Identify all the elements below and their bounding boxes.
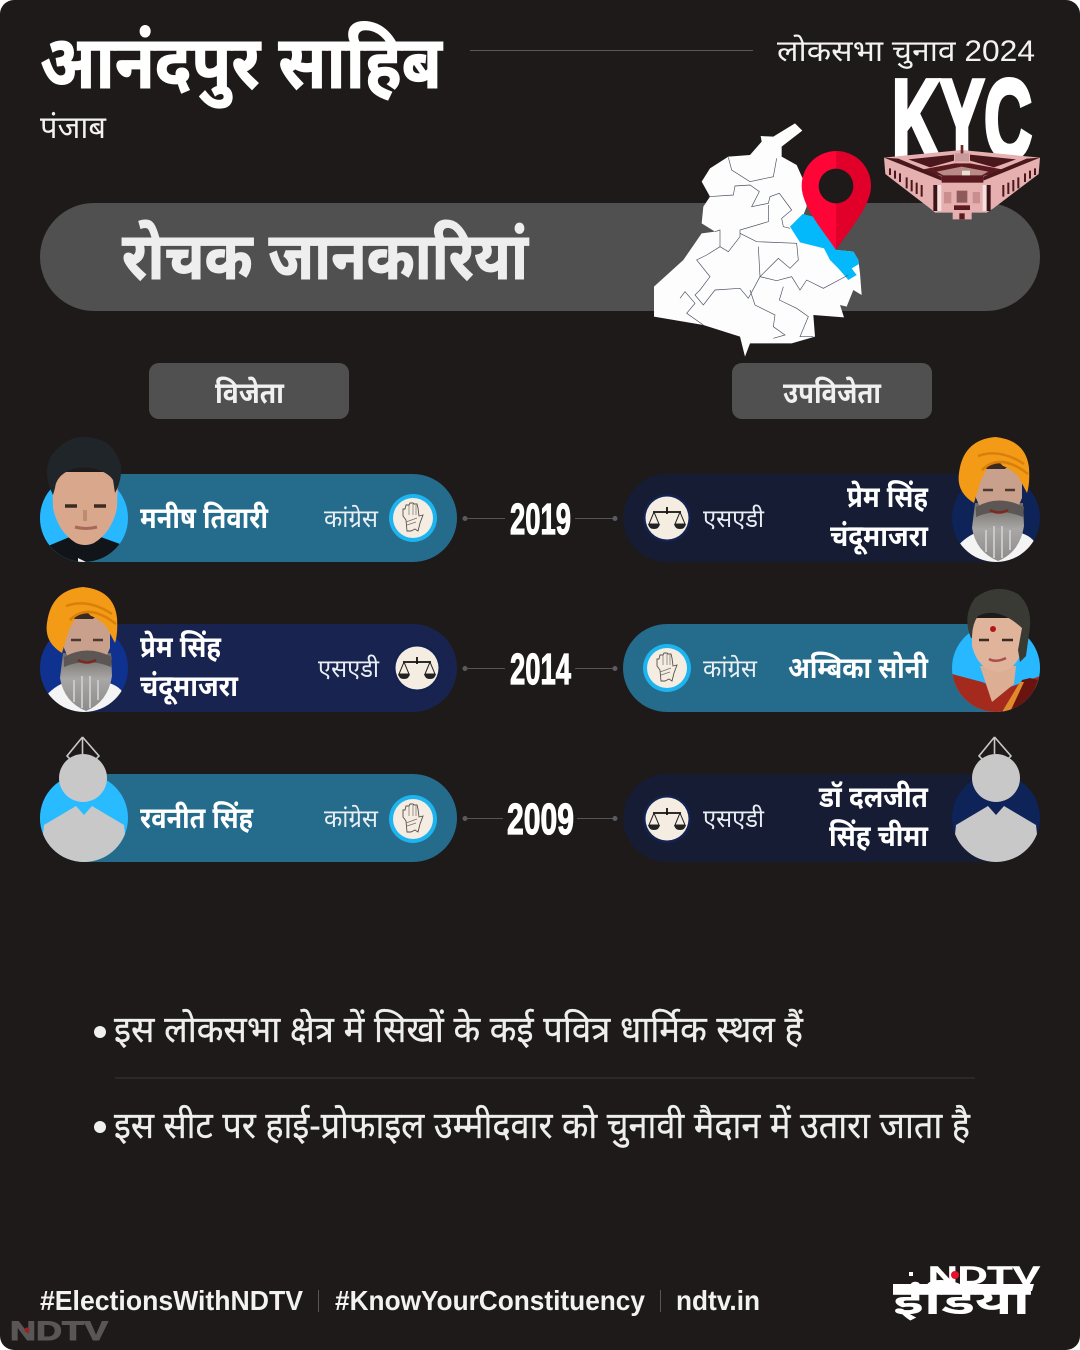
footer hashtags: #KnowYourConstituency: [335, 1285, 645, 1316]
fact 2: इस सीट पर हाई-प्रोफाइल उम्मीदवार को चुनावी मैदान में उतारा जाता है: [114, 1104, 971, 1148]
winner name: मनीष तिवारी: [140, 501, 269, 535]
row 2009 winner: [40, 737, 457, 862]
placeholder portrait: [40, 737, 128, 862]
footer hashtags: ndtv.in: [676, 1285, 760, 1316]
party name: कांग्रेस: [703, 653, 758, 683]
runner-up name: प्रेम सिंह: [847, 479, 929, 514]
label: winner: विजेता: [215, 375, 285, 410]
winner name: चंदूमाजरा: [140, 670, 239, 705]
NDTV watermark: NDTV: [10, 1316, 108, 1346]
NDTV India logo: NDTV: [928, 1262, 1041, 1290]
title: आनंदपुर साहिब: [40, 21, 443, 108]
label: winner: [149, 363, 349, 419]
row 2019 year: [462, 495, 618, 544]
icon: scales symbol: [643, 795, 691, 843]
icon: hand symbol: [389, 795, 437, 843]
row 2019 runner-up: [623, 437, 1040, 562]
election label: लोकसभा चुनाव 2024: [777, 34, 1035, 69]
portrait: Prem Singh Chandumajra: [952, 437, 1040, 562]
party name: कांग्रेस: [324, 803, 379, 833]
map of Punjab: [654, 123, 862, 357]
row 2009 runner-up: [623, 737, 1040, 862]
row 2019 winner: [40, 437, 457, 562]
icon: hand symbol: [389, 494, 437, 542]
runner-up name: डॉ दलजीत: [818, 780, 929, 814]
row 2014 runner-up: [623, 589, 1040, 712]
runner-up name: अम्बिका सोनी: [788, 651, 929, 685]
icon: scales symbol: [393, 644, 441, 692]
NDTV India logo: इंडिया: [893, 1279, 1031, 1323]
footer hashtags: #ElectionsWithNDTV: [40, 1285, 303, 1316]
label: runner-up: उपविजेता: [783, 375, 882, 410]
icon: location pin: [802, 151, 871, 250]
NDTV India logo: [893, 1262, 1041, 1323]
icon: scales symbol: [643, 494, 691, 542]
portrait: Ambika Soni: [952, 589, 1040, 712]
label: runner-up: [732, 363, 932, 419]
party name: एसएडी: [703, 804, 764, 833]
party name: एसएडी: [318, 654, 379, 683]
footer hashtags: [40, 1285, 760, 1316]
row 2014 year: [462, 645, 618, 694]
icon: parliament building: [884, 145, 1040, 219]
fact 1: इस लोकसभा क्षेत्र में सिखों के कई पवित्र धार्मिक स्थल हैं: [114, 1008, 804, 1050]
row 2014 year: 2014: [510, 645, 571, 694]
banner heading: रोचक जानकारियां: [122, 219, 529, 293]
row 2019 year: 2019: [510, 495, 571, 544]
subtitle: state: पंजाब: [40, 110, 107, 145]
party name: कांग्रेस: [324, 503, 379, 533]
row 2014 winner: [40, 587, 457, 712]
icon: hand symbol: [643, 644, 691, 692]
runner-up name: सिंह चीमा: [829, 819, 929, 853]
placeholder portrait: [952, 737, 1040, 862]
party name: एसएडी: [703, 504, 764, 533]
runner-up name: चंदूमाजरा: [830, 520, 929, 555]
row 2009 year: 2009: [507, 795, 574, 844]
winner name: प्रेम सिंह: [140, 629, 222, 664]
portrait: Manish Tewari: [40, 437, 128, 562]
winner name: रवनीत सिंह: [140, 801, 254, 835]
portrait: Prem Singh Chandumajra: [40, 587, 128, 712]
row 2009 year: [462, 795, 618, 844]
banner: [40, 203, 1040, 311]
